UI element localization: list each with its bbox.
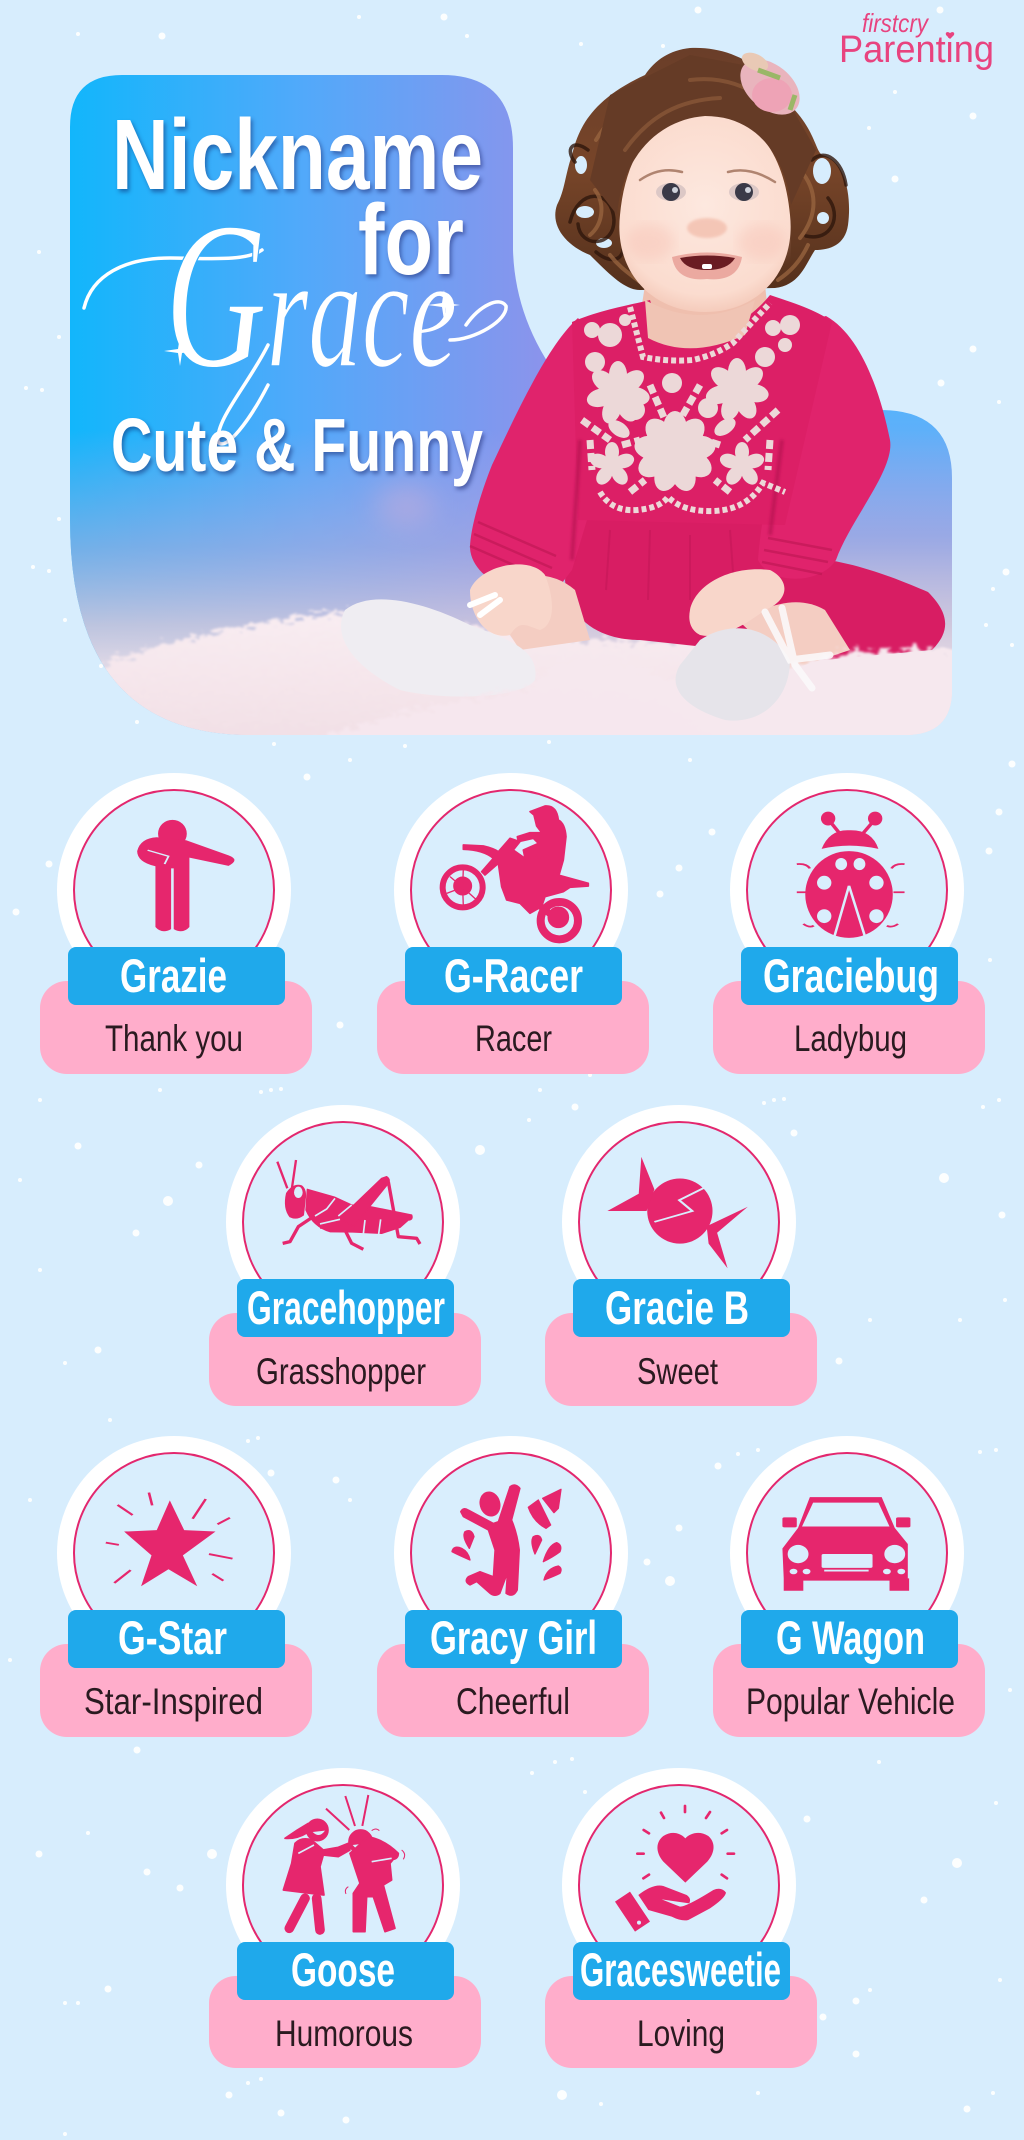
side flowers bbox=[585, 361, 651, 426]
title: Grace script bbox=[84, 180, 506, 444]
left hand bbox=[470, 564, 552, 636]
logo heart bbox=[946, 32, 954, 39]
icon: ladybug bbox=[797, 812, 905, 938]
icon: cheerful jumping person bbox=[452, 1485, 561, 1595]
sparkles on title bbox=[164, 290, 460, 366]
shoe bow bbox=[765, 608, 830, 688]
name box: Gracy Girl bbox=[430, 1611, 597, 1664]
subtitle box bbox=[209, 1976, 481, 2068]
ring bbox=[394, 773, 628, 1007]
ring bbox=[562, 1768, 796, 2002]
subtitle box bbox=[40, 1644, 312, 1737]
nose bbox=[687, 218, 727, 238]
subtitle box: Popular Vehicle bbox=[746, 1681, 955, 1722]
subtitle box: Star-Inspired bbox=[84, 1681, 263, 1722]
neck skin bbox=[645, 300, 755, 348]
icon: car front bbox=[782, 1497, 910, 1591]
curl gaps bbox=[575, 156, 831, 248]
subtitle box bbox=[377, 981, 649, 1074]
name box bbox=[68, 947, 285, 1005]
arm shading bbox=[572, 440, 782, 560]
hair clip bbox=[730, 48, 810, 126]
subtitle box bbox=[713, 981, 985, 1074]
logo: firstcry: firstcry bbox=[862, 8, 930, 38]
name box: Gracie B bbox=[605, 1281, 749, 1334]
name box: Grazie bbox=[120, 949, 227, 1002]
foreground fur tufts bbox=[481, 730, 484, 733]
card: G Wagon bbox=[713, 1436, 985, 1737]
subtitle box: Cheerful bbox=[456, 1681, 570, 1722]
ring bbox=[226, 1768, 460, 2002]
icon: wrapped candy bbox=[607, 1157, 748, 1268]
logo: Parenting: Parenting bbox=[839, 29, 994, 71]
card: Graciebug bbox=[713, 773, 985, 1074]
name box: G Wagon bbox=[776, 1611, 925, 1664]
leaf sprigs bbox=[582, 385, 778, 492]
sleeves bbox=[470, 318, 605, 594]
subtitle box: Thank you bbox=[105, 1018, 243, 1059]
hero panel with photo illustration bbox=[60, 48, 970, 760]
title: Nickname: Nickname bbox=[112, 99, 483, 211]
ring bbox=[394, 1436, 628, 1670]
foreground fur bbox=[790, 641, 934, 670]
eyes bbox=[656, 183, 686, 201]
thighs and feet skin bbox=[480, 575, 590, 650]
subtitle box bbox=[40, 981, 312, 1074]
ring bbox=[730, 1436, 964, 1670]
cuffs bbox=[470, 522, 832, 580]
subtitle box: Grasshopper bbox=[256, 1351, 426, 1392]
title bbox=[84, 99, 506, 487]
front hair bbox=[590, 55, 816, 215]
right hand bbox=[689, 569, 784, 636]
name box: Gracehopper bbox=[247, 1281, 445, 1334]
subtitle box: Ladybug bbox=[794, 1018, 907, 1059]
name box bbox=[68, 1610, 285, 1668]
subtitle box bbox=[545, 1976, 817, 2068]
subtitle box bbox=[377, 1644, 649, 1737]
name box bbox=[573, 1942, 790, 2000]
subtitle box: Humorous bbox=[275, 2013, 413, 2054]
subtitle box: Sweet bbox=[637, 1351, 719, 1392]
cheeks bbox=[626, 224, 674, 260]
embroidery bbox=[582, 303, 800, 511]
icon: person bowing thanks bbox=[137, 820, 234, 931]
name box bbox=[237, 1279, 454, 1337]
card: Grazie bbox=[40, 773, 312, 1074]
ring bbox=[730, 773, 964, 1007]
icon: dirt bike racer bbox=[443, 806, 588, 939]
hair bbox=[555, 48, 849, 290]
subtitle box bbox=[545, 1313, 817, 1406]
card: Goose bbox=[209, 1768, 481, 2068]
name box: Graciebug bbox=[763, 949, 939, 1002]
baby illustration bbox=[342, 48, 946, 720]
title: Cute and Funny: Cute & Funny bbox=[111, 403, 483, 487]
card: Gracehopper bbox=[209, 1105, 481, 1406]
name box: G-Racer bbox=[444, 949, 583, 1002]
icon: hand holding heart bbox=[615, 1806, 734, 1932]
card: Gracesweetie bbox=[545, 1768, 817, 2068]
name box: Goose bbox=[291, 1943, 395, 1996]
left shoe bbox=[341, 599, 536, 697]
ring bbox=[57, 773, 291, 1007]
name box bbox=[237, 1942, 454, 2000]
ring bbox=[57, 1436, 291, 1670]
subtitle box bbox=[209, 1313, 481, 1406]
ring bbox=[226, 1105, 460, 1339]
card: Gracie B bbox=[545, 1105, 817, 1406]
gradient panel bbox=[60, 70, 970, 760]
name box: Gracesweetie bbox=[580, 1943, 781, 1996]
subtitle box bbox=[713, 1644, 985, 1737]
icon: two people laughing bbox=[283, 1795, 405, 1932]
card: G-Star bbox=[40, 1436, 312, 1737]
neck bbox=[638, 285, 770, 352]
icon: grasshopper bbox=[277, 1160, 420, 1249]
mouth bbox=[672, 252, 742, 279]
icon: star bbox=[106, 1493, 233, 1586]
logo bbox=[839, 8, 994, 71]
body: romper skirt bbox=[565, 510, 945, 660]
title: Grace script: Grace bbox=[165, 180, 457, 412]
centre flower bbox=[633, 411, 717, 495]
card: Gracy Girl bbox=[377, 1436, 649, 1737]
face bbox=[619, 112, 791, 312]
subtitle box: Loving bbox=[637, 2013, 725, 2054]
small stars bbox=[662, 373, 682, 393]
name box: G-Star bbox=[118, 1611, 227, 1664]
ring bbox=[562, 1105, 796, 1339]
torso bbox=[572, 295, 832, 525]
right shoe bbox=[676, 628, 790, 721]
card: G-Racer bbox=[377, 773, 649, 1074]
title: for: for bbox=[358, 184, 464, 296]
subtitle box: Racer bbox=[475, 1018, 552, 1059]
